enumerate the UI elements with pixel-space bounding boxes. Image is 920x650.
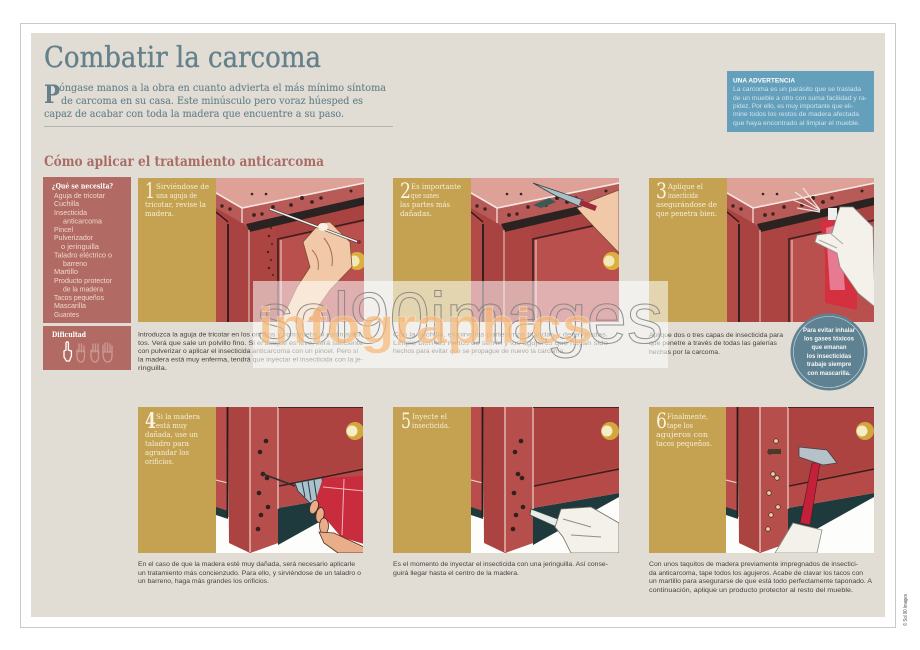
panel: qué se necesita: barreno [63, 261, 87, 268]
watermark: sol90images [257, 279, 663, 359]
step 6: tape los [667, 421, 693, 430]
step 5 [393, 407, 619, 577]
panel: qué se necesita: de la madera [63, 286, 103, 294]
step 1: una aguja de [156, 191, 197, 200]
step 4: está muy [156, 421, 188, 430]
step 3 body text: hechas por la carcoma. [649, 349, 720, 356]
step 2: las partes más [400, 200, 450, 209]
callout: mask warning circle: los gases tóxicos [804, 336, 855, 342]
panel: qué se necesita: Guantes [54, 312, 79, 319]
panel: qué se necesita: Pincel [54, 227, 73, 234]
callout: mask warning circle: que emanan [811, 345, 847, 351]
step 6: tacos pequeños. [656, 439, 712, 448]
callout: una advertencia: pidez. Por ello, es muy importante que eli- [733, 104, 853, 110]
step 6: Finalmente, [667, 412, 708, 421]
watermark: infographics [258, 298, 593, 354]
step 4: 4 [145, 408, 156, 433]
title: Combatir la carcoma [44, 40, 321, 74]
panel: dificultad [43, 326, 131, 370]
step 5 caption panel [393, 407, 471, 553]
panel: dificultad: Dificultad [52, 330, 86, 339]
icon: difficulty hands [64, 342, 112, 362]
panel: qué se necesita: anticarcoma [63, 218, 102, 226]
panel: qué se necesita: Tacos pequeños [54, 295, 104, 302]
step 5 illustration: injecting insecticide [471, 407, 619, 553]
step 1 [138, 178, 366, 372]
drop cap: P [44, 80, 60, 109]
step 1 body text: ringuilla. [138, 365, 167, 372]
step 1: 1 [145, 179, 155, 203]
panel: qué se necesita: Insecticida [54, 210, 87, 217]
step 1 body text: con pulverizar o aplicar el insecticida anticarcoma con un pincel. Pero si [138, 348, 358, 355]
step 3: 3 [656, 179, 667, 203]
step 6 body text: un martillo para asegurarse de que está todo perfectamente taponado. A [649, 578, 872, 585]
step 3: insecticida [668, 191, 698, 200]
callout: una advertencia: UNA ADVERTENCIA [733, 78, 795, 84]
panel: qué se necesita: Producto protector [54, 278, 113, 285]
step 4: Si la madera [156, 412, 200, 421]
callout: mask warning circle: Para evitar inhalar [803, 328, 856, 334]
step 4: dañada, use un [145, 430, 198, 439]
panel: qué se necesita: o jeringuilla [61, 244, 99, 251]
step 6 body text [649, 561, 872, 594]
step 1 body text: tos. Verá que sale un polvillo fino. Si el ataque es leve, será suficiente [138, 340, 363, 347]
step 4 [138, 407, 364, 585]
step 4: orificios. [145, 457, 174, 466]
step 3 caption panel [649, 178, 727, 322]
panel: qué se necesita: ¿Qué se necesita? [52, 182, 113, 190]
step 2 [393, 178, 621, 355]
callout: una advertencia [727, 71, 874, 132]
step 6 caption panel [649, 407, 726, 553]
step 5: Inyecte el [412, 412, 447, 421]
step 3 body text: Aplique dos o tres capas de insecticida para [649, 332, 783, 339]
panel: qué se necesita: Martillo [54, 269, 78, 276]
callout: una advertencia: que haya encontrado al limpiar el mueble. [733, 121, 860, 127]
step 5 body text: Es el momento de inyectar el insecticida con una jeringuilla. Así conse- [393, 561, 608, 568]
step 6: agujeros con [656, 430, 708, 439]
step 2 body text: Limpie bien los restos de serrín y los agujeros que hayan sido [393, 340, 608, 347]
step 4 body text: En el caso de que la madera esté muy dañada, será necesario aplicarle [138, 561, 355, 568]
step 1: Sirviéndose de [156, 182, 209, 191]
step 4 body text: un barreno, haga más grandes los orificios. [138, 578, 269, 585]
step 3 body text [649, 332, 783, 356]
intro text: capaz de acabar con toda la madera que encuentre a su paso. [44, 108, 344, 120]
step 5: insecticida. [412, 421, 450, 430]
step 3: asegurándose de [656, 200, 717, 209]
step 3: que penetra bien. [656, 209, 717, 218]
step 5 body text: guirá llegar hasta el centro de la madera. [393, 570, 519, 577]
step 2 body text: Con la cuchilla, elimine las partes más blandas y deterioradas. [393, 332, 608, 338]
callout: una advertencia: de un mueble a otro con suma facilidad y ra- [733, 96, 867, 102]
callout: una advertencia: mine todos los restos de madera afectada [733, 112, 860, 118]
step 6 [649, 407, 874, 594]
step 1 illustration: needle probing holes [216, 178, 364, 322]
step 2: dañadas. [400, 209, 432, 218]
step 2 caption panel [393, 178, 471, 322]
step 6: 6 [656, 409, 667, 433]
callout: mask warning circle: trabaje siempre [807, 362, 852, 368]
step 4 illustration: drilling [216, 407, 363, 553]
callout: mask warning circle: los insecticidas [807, 354, 852, 360]
step 4 caption panel [138, 407, 216, 553]
panel: qué se necesita: Cuchilla [54, 201, 79, 208]
step 6 body text: da anticarcoma, tape todos los agujeros. Acabe de clavar los tacos con [649, 570, 863, 577]
step 3 [649, 178, 877, 356]
panel: qué se necesita: Aguja de tricotar [54, 193, 106, 200]
step 1 caption panel [138, 178, 216, 322]
step 2: Es importante [411, 182, 461, 191]
step 1 body text [138, 332, 363, 372]
step 4: taladro para [145, 439, 189, 448]
panel: qué se necesita [43, 177, 131, 323]
step 2: que sanes [411, 191, 439, 200]
step 6 body text: continuación, aplique un producto protector al resto del mueble. [649, 587, 853, 594]
step 5 body text [393, 561, 608, 577]
step 3 illustration: spraying insecticide [727, 178, 874, 322]
panel: qué se necesita: Pulverizador [54, 235, 94, 242]
step 4: agrandar los [145, 448, 189, 457]
step 2 body text [393, 332, 608, 355]
step 2 illustration: knife cleaning damaged parts [471, 178, 619, 322]
section heading: Cómo aplicar el tratamiento anticarcoma [44, 154, 324, 170]
intro text [44, 80, 387, 120]
panel: qué se necesita: Taladro eléctrico o [54, 252, 112, 260]
credit: © Sol 90 Images [902, 594, 909, 626]
step 1 body text: la madera está muy enferma, tendrá que inyectar el insecticida con la je- [138, 356, 363, 364]
step 6 body text: Con unos taquitos de madera previamente impregnados de insectici- [649, 561, 858, 568]
intro text: óngase manos a la obra en cuanto advierta el más mínimo síntoma [59, 82, 387, 94]
step 4 body text [138, 561, 361, 585]
callout: una advertencia: La carcoma es un parásito que se traslada [733, 87, 862, 93]
step 3: Aplique el [667, 182, 703, 191]
step 2: 2 [400, 179, 411, 203]
panel: qué se necesita: Mascarilla [54, 303, 86, 310]
intro text: de carcoma en su casa. Este minúsculo pero voraz húesped es [61, 95, 363, 107]
step 2 body text: hechos para evitar que se propague de nuevo la carcoma. [393, 348, 565, 355]
step 4 body text: un tratamiento más concienzudo. Para ello, y sirviéndose de un taladro o [138, 570, 361, 577]
step 1 body text: Introduzca la aguja de tricotar en los orificios y compruebe si están abier- [138, 332, 363, 338]
step 3 body text: que penetre a través de todas las galerías [649, 340, 778, 347]
step 1: tricotar, revise la [145, 200, 206, 209]
step 1: madera. [145, 209, 174, 218]
step 6 illustration: hammering plugs [726, 407, 874, 553]
callout: mask warning circle: con mascarilla. [807, 371, 851, 377]
step 5: 5 [401, 409, 411, 433]
callout: mask warning circle [790, 314, 868, 390]
